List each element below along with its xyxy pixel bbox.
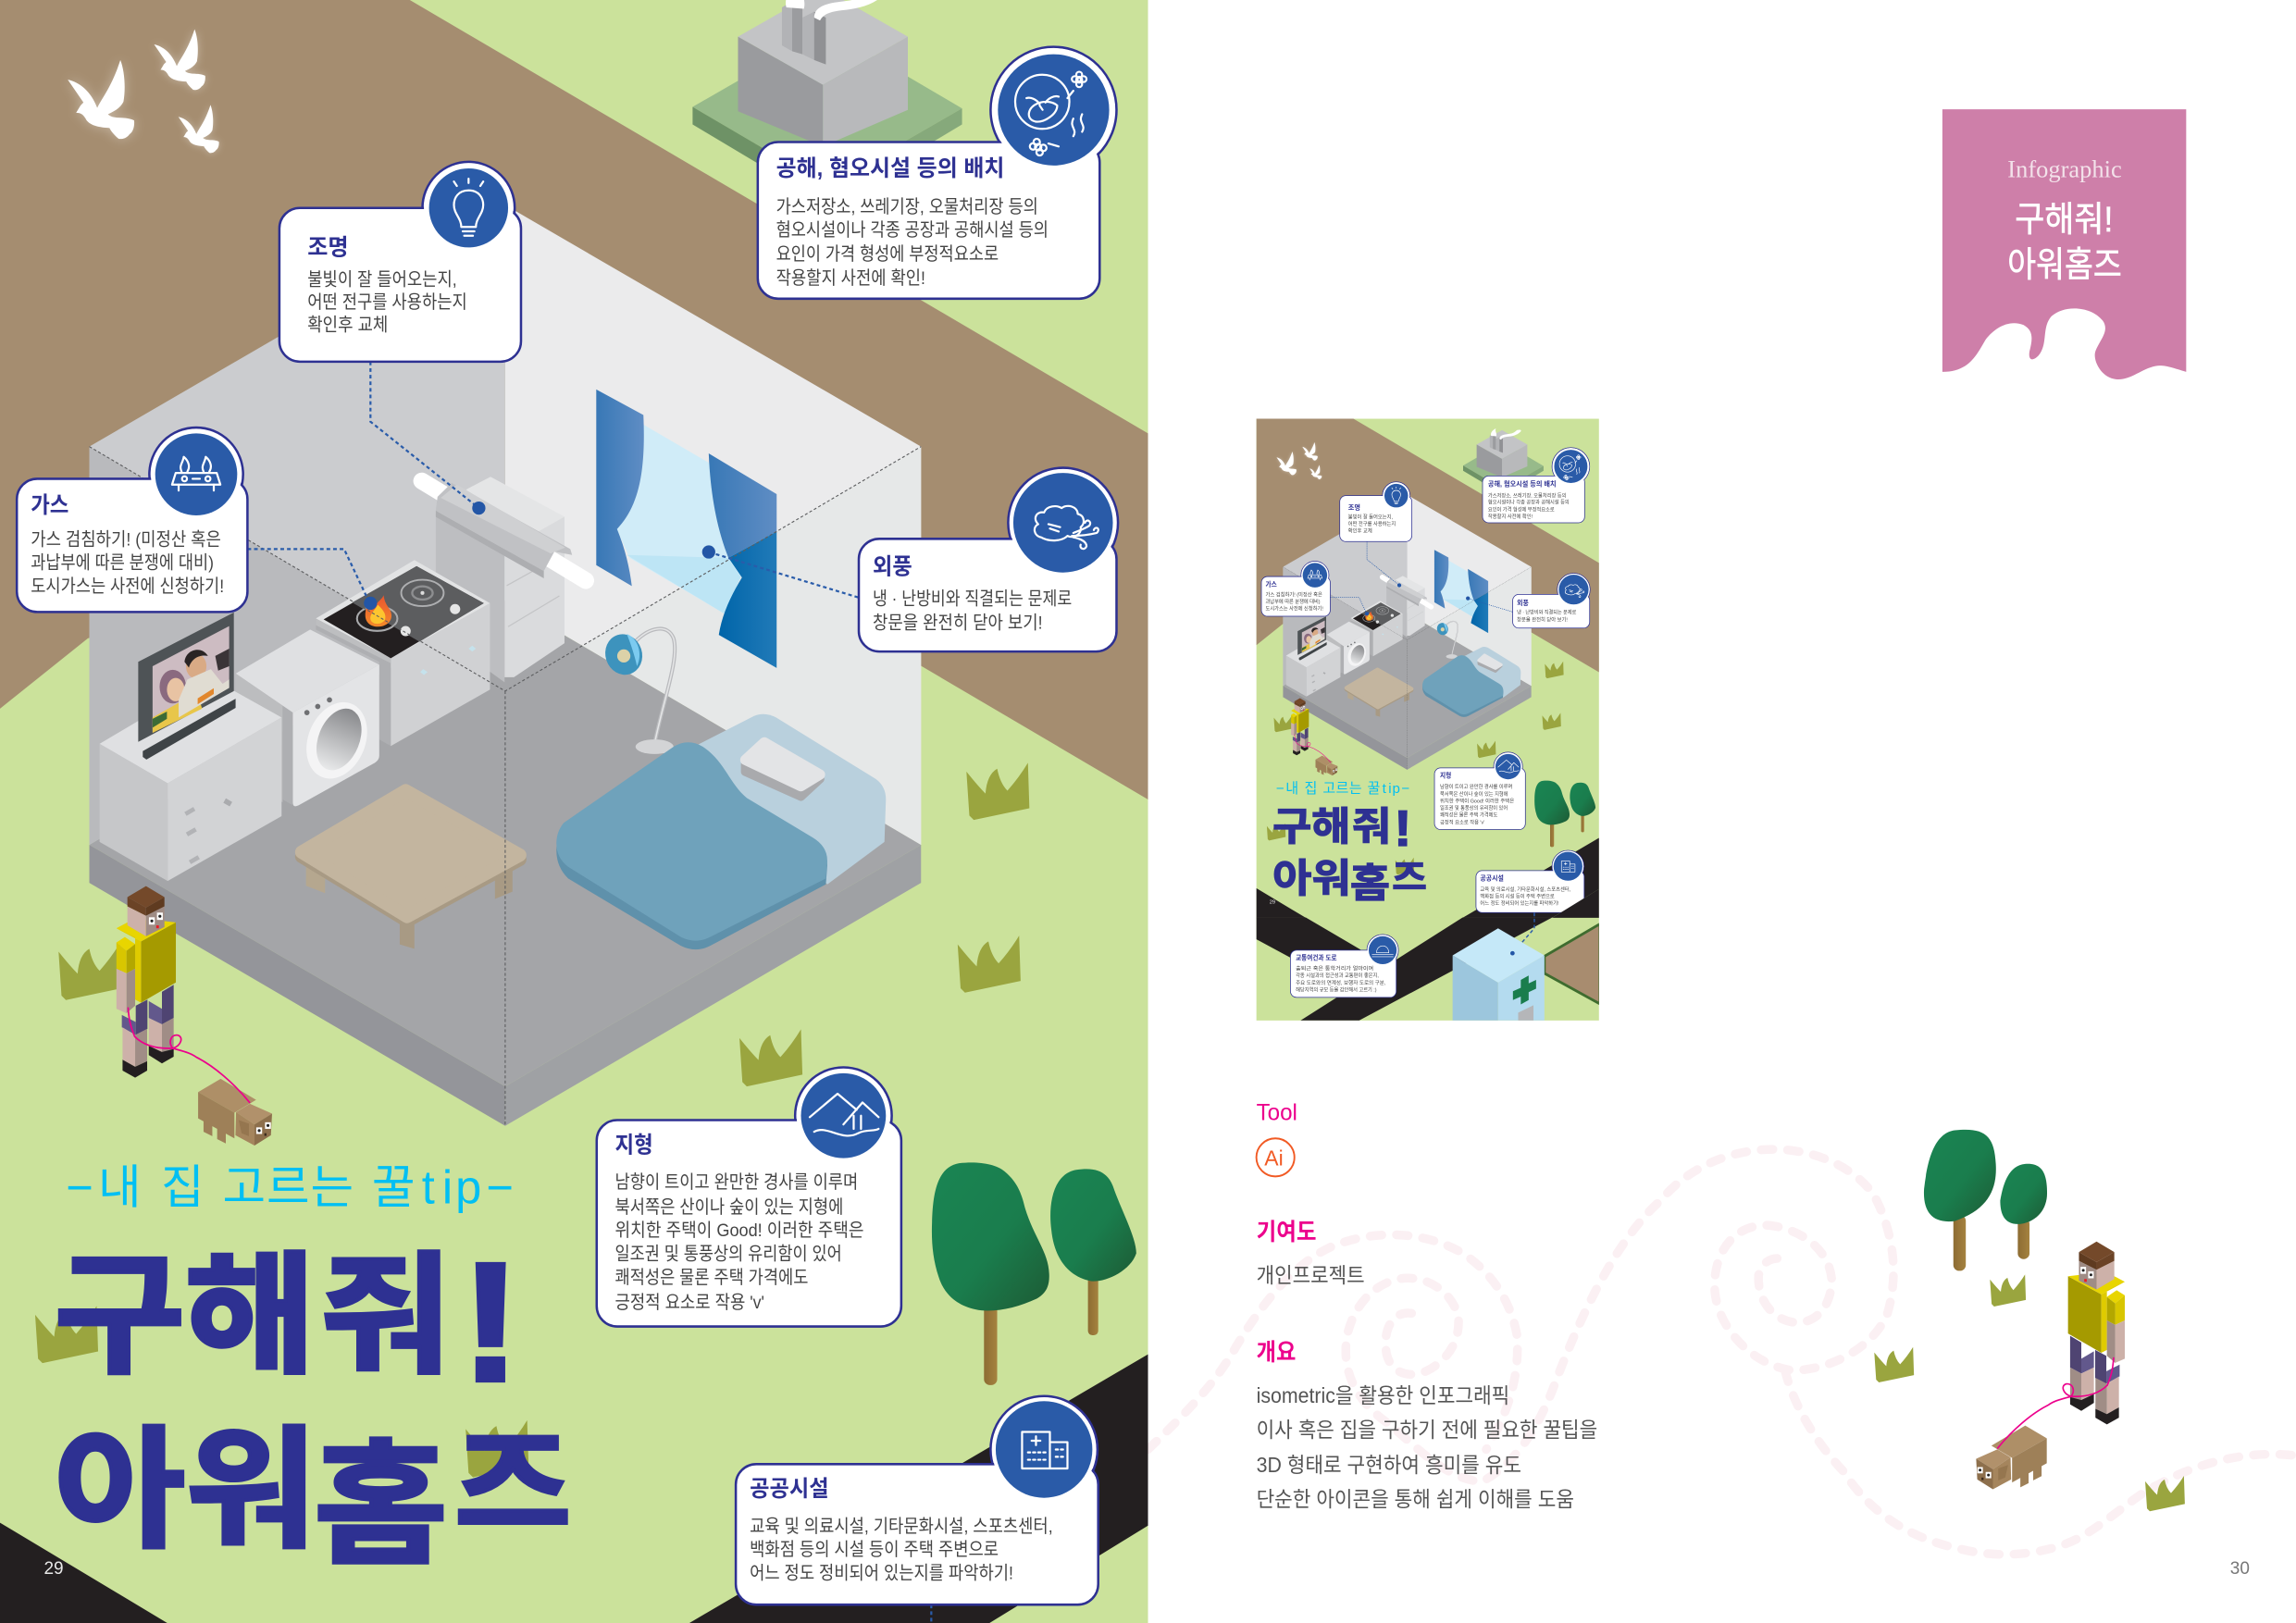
hospital: [1453, 928, 1545, 1021]
text: contribution: 개인프로젝트: [1257, 1263, 1365, 1287]
ribbon label: Infographic: [2007, 155, 2122, 182]
grass tufts: [35, 762, 1029, 1478]
main title line 2: 아워: [55, 1418, 316, 1565]
main title line 2: 홈: [314, 1431, 448, 1581]
panel: terrain: [597, 1068, 901, 1327]
heading: contribution: 기여도: [1257, 1220, 1316, 1245]
text: lighting: [307, 270, 467, 336]
text: terrain: 북서쪽은 산이나 숲이 있는 지형에: [615, 1197, 843, 1218]
ribbon title line 1: 구해줘!: [2015, 201, 2113, 240]
text: terrain: 일조권 및 통풍상의 유리함이 있어: [615, 1245, 842, 1265]
panel: traffic and roads: 각종 시설과의 접근성과 교통편이 좋은지,: [1296, 972, 1379, 979]
text: terrain: 쾌적성은 물론 주택 가격에도: [615, 1268, 808, 1288]
lower roads: [1257, 889, 1599, 1021]
connector: gas: [247, 549, 377, 610]
miniature full poster: [1257, 419, 1600, 1022]
back walls: [90, 205, 505, 845]
page number 30: 30: [2230, 1559, 2250, 1579]
connector: draft: [702, 545, 858, 598]
icon: light bulb: [454, 179, 483, 236]
connector: public facilities: [930, 1604, 932, 1623]
table: [302, 790, 520, 948]
isometric room: [90, 205, 921, 1126]
text: drafts: [873, 589, 1072, 634]
text: terrain: 긍정적 요소로 작용 'v': [615, 1293, 764, 1313]
ribbon title line 2: 아워홈즈: [2007, 246, 2122, 285]
heading: public facilities: 공공시설: [750, 1476, 829, 1502]
icon: mountains and water: [810, 1094, 878, 1135]
connector: lighting: [370, 362, 486, 514]
text: overview: 단순한 아이콘을 통해 쉽게 이해를 도움: [1257, 1487, 1574, 1511]
black road left: [0, 1523, 168, 1623]
right page person walking dog: [1976, 1242, 2125, 1489]
text: lighting: 확인후 교체: [307, 316, 388, 336]
text: lighting: 어떤 전구를 사용하는지: [307, 292, 467, 313]
dresser: [100, 678, 281, 881]
icon: Ai badge: [1257, 1138, 1295, 1176]
main title line 1: 구해줘: [55, 1244, 452, 1390]
icon: hospital building: [1022, 1431, 1067, 1468]
heading: terrain: 지형: [615, 1132, 653, 1158]
factory on green pad: [692, 0, 962, 205]
panel: traffic and roads: [1290, 935, 1398, 997]
trees: [932, 1162, 1136, 1385]
text: terrain: 위치한 주택이 Good! 이러한 주택은: [615, 1220, 864, 1241]
heading: drafts: 외풍: [873, 553, 912, 579]
panel: gas: [17, 427, 247, 612]
poster artwork: [0, 0, 1148, 1623]
text: gas: 과납부에 따른 분쟁에 대비): [31, 553, 214, 574]
tall cabinet with hood: [422, 477, 586, 682]
panel: lighting: [279, 162, 521, 362]
washing machine: [236, 629, 379, 806]
text: public facilities: [750, 1517, 1053, 1584]
icon: blowing cloud: [1035, 506, 1098, 549]
panel: traffic and roads: 출퇴근 혹은 통학거리가 얼마이며: [1296, 965, 1373, 973]
text: pollution: 가스저장소, 쓰레기장, 오물처리장 등의: [776, 197, 1038, 217]
bed: [556, 714, 886, 949]
brown ground band: [0, 0, 1148, 799]
heading: overview: 개요: [1257, 1340, 1296, 1366]
text: drafts: 창문을 완전히 닫아 보기!: [873, 613, 1043, 634]
page number 29: 29: [43, 1559, 64, 1579]
text: overview: 3D 형태로 구현하여 흥미를 유도: [1257, 1453, 1521, 1477]
panel: pollution and nuisance facilities: [758, 47, 1116, 299]
glass box dashed edges: [90, 447, 921, 1126]
text: pollution: 혐오시설이나 각종 공장과 공해시설 등의: [776, 220, 1049, 241]
window with curtains: [596, 390, 776, 668]
heading: gas: 가스: [31, 492, 68, 518]
text: overview: [1257, 1383, 1597, 1511]
desk lamp: [600, 628, 675, 754]
text: terrain: 남향이 트이고 완만한 경사를 이루며: [615, 1172, 858, 1193]
text: gas: 도시가스는 사전에 신청하기!: [31, 576, 224, 597]
main title line 2: 즈: [454, 1419, 571, 1551]
heading: lighting: 조명: [307, 234, 349, 260]
connector to hospital: [1512, 912, 1534, 953]
lower ground: [1257, 917, 1599, 1022]
heading: pollution: 공해, 혐오시설 등의 배치: [776, 155, 1004, 181]
park patch: [1545, 924, 1600, 1004]
heading: tool: Tool: [1257, 1099, 1297, 1125]
white doves: [68, 30, 219, 153]
panel: traffic and roads: 교통여건과 도로: [1296, 954, 1337, 962]
green ground: [0, 0, 1148, 1623]
icon: gas stove: [172, 457, 220, 490]
right page dashed trail: [1148, 1149, 2293, 1555]
text: pollution: 요인이 가격 형성에 부정적요소로: [776, 244, 999, 265]
right page trees: [1924, 1130, 2047, 1270]
icon: Ai badge: Ai: [1264, 1146, 1284, 1171]
text: gas: [31, 529, 224, 597]
counter with stove: [316, 560, 490, 746]
text: drafts: 냉 · 난방비와 직결되는 문제로: [873, 589, 1072, 610]
text: public facilities: 어느 정도 정비되어 있는지를 파악하기!: [750, 1564, 1013, 1584]
text: terrain: [615, 1172, 864, 1313]
panel: drafts: [859, 468, 1118, 651]
panel: public facilities: [736, 1396, 1098, 1604]
text: gas: 가스 검침하기! (미정산 혹은: [31, 529, 221, 550]
left page poster crop: [0, 0, 1148, 1623]
text: public facilities: 교육 및 의료시설, 기타문화시설, 스포츠센터,: [750, 1517, 1053, 1537]
panel: traffic and roads: 주요 도로와의 연계성, 보행자 도로의 구분,: [1296, 979, 1386, 986]
right page grass tufts: [1874, 1274, 2185, 1511]
television: [138, 613, 236, 760]
panel: traffic and roads: 해당지역의 규모 등을 감안해서 고르기 :): [1296, 986, 1376, 994]
text: pollution: [776, 197, 1049, 289]
person walking dog: [117, 886, 272, 1146]
black road right: [689, 1355, 1148, 1623]
text: overview: 이사 혹은 집을 구하기 전에 필요한 꿀팁을: [1257, 1418, 1597, 1442]
text: lighting: 불빛이 잘 들어오는지,: [307, 270, 457, 291]
main title line 1: !: [460, 1228, 521, 1418]
text: pollution: 작용할지 사전에 확인!: [776, 268, 925, 289]
subtitle: −내 집 고르는 꿀tip−: [66, 1161, 514, 1214]
text: public facilities: 백화점 등의 시설 등이 주택 주변으로: [750, 1540, 999, 1560]
slab and floor: [90, 845, 505, 1126]
text: overview: isometric을 활용한 인포그래픽: [1257, 1383, 1509, 1407]
icon: unhappy face and smells: [1015, 72, 1086, 155]
panel: pink title ribbon: [1942, 109, 2186, 379]
